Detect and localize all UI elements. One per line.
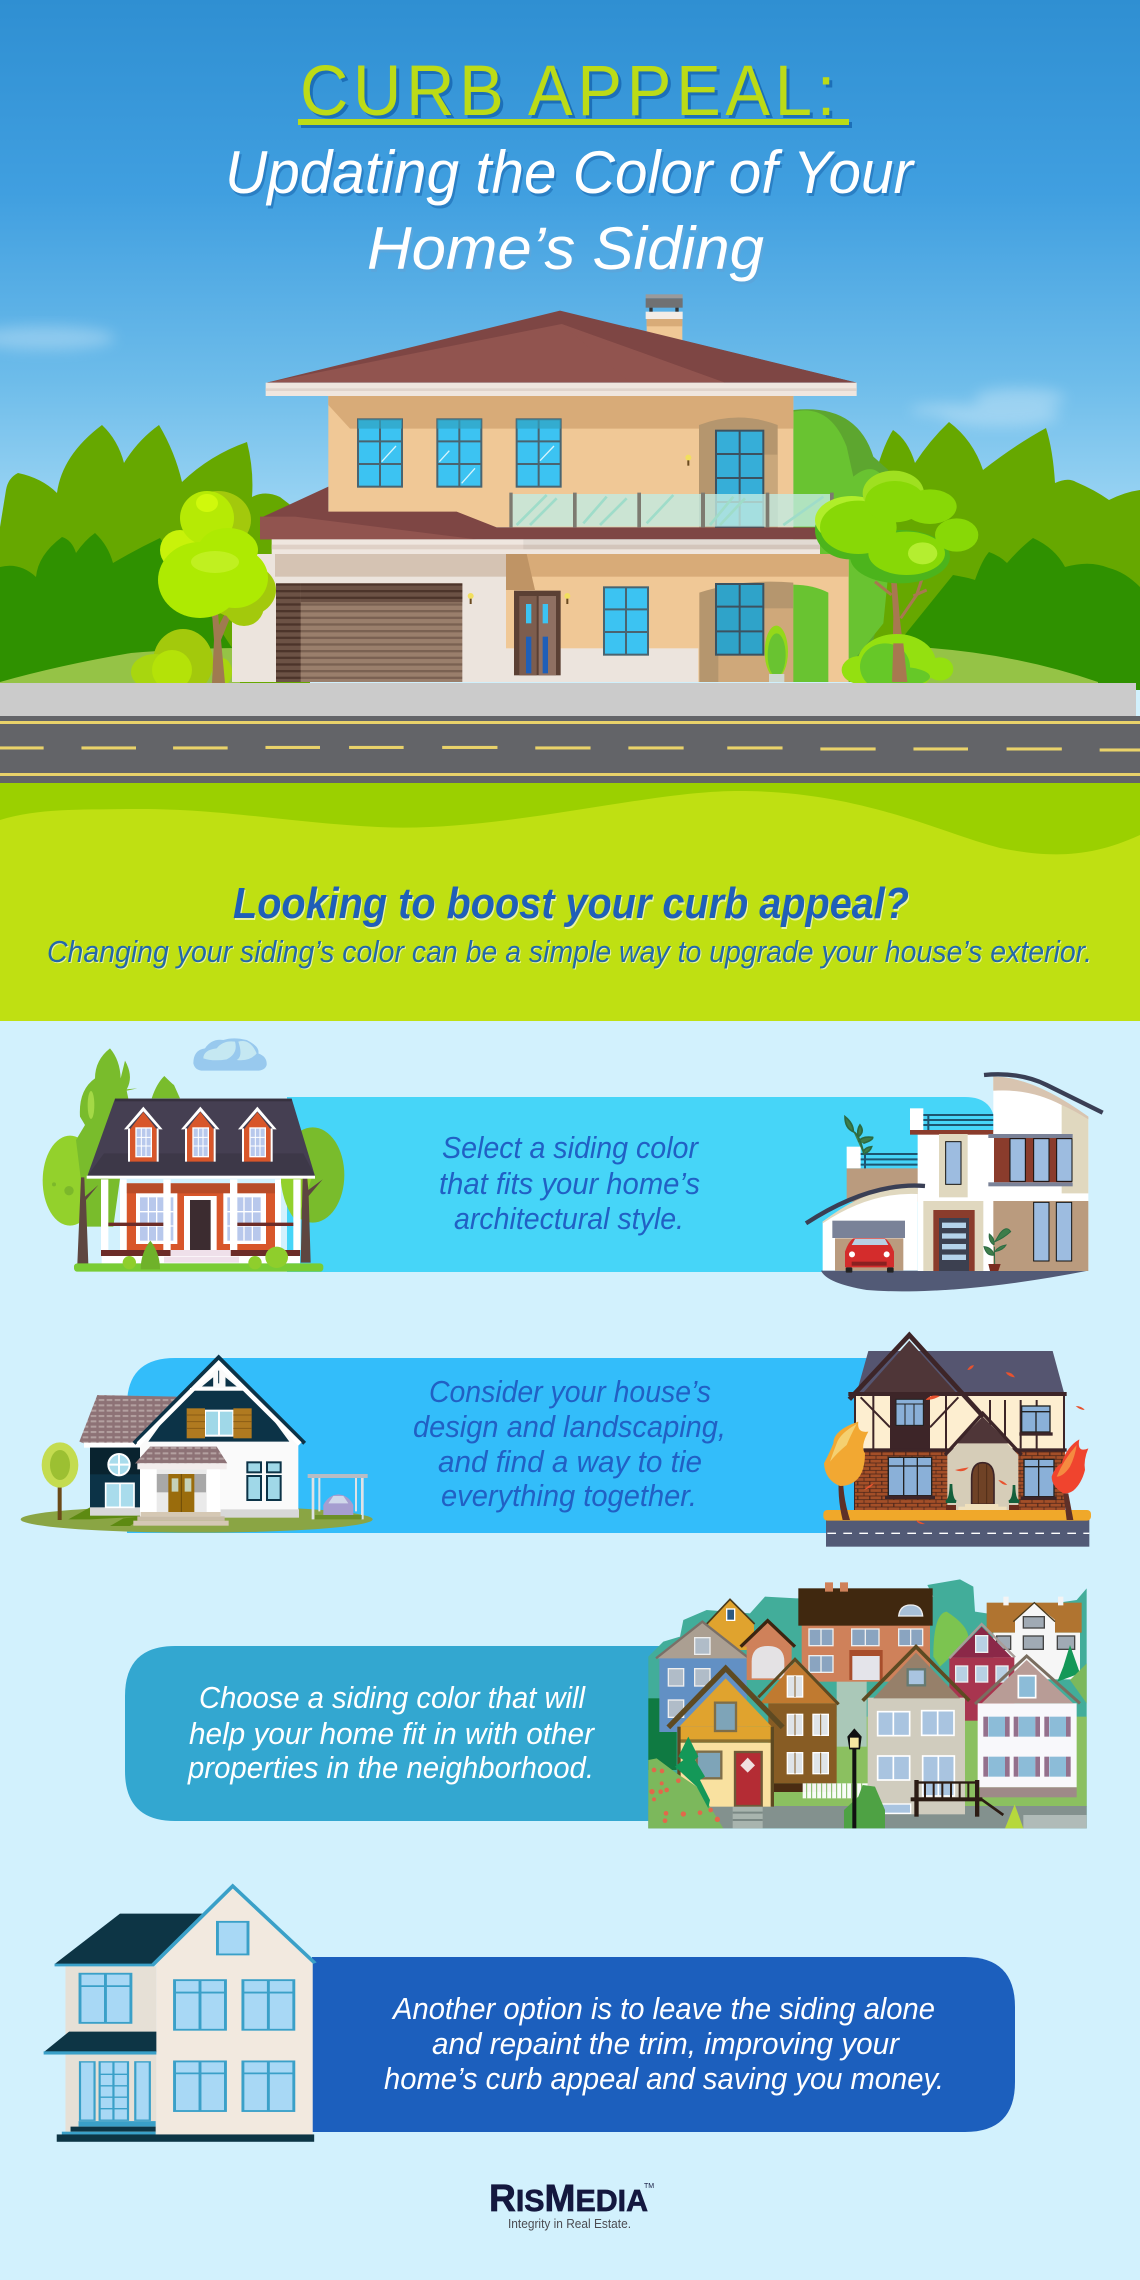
picket fence <box>803 1783 868 1798</box>
brown-roof brick house <box>798 1582 933 1682</box>
curved top roof line <box>984 1074 1103 1113</box>
road <box>0 716 1140 783</box>
ground <box>648 1612 1087 1828</box>
tip 1 bar <box>287 1097 995 1272</box>
illustration: orange porch house <box>43 1038 344 1272</box>
tip 1 text <box>439 1130 700 1236</box>
panel: tip 4 <box>44 1886 1015 2142</box>
title underline <box>298 119 849 125</box>
trademark: TM <box>644 2183 654 2190</box>
lawn and shrubs <box>74 1241 323 1272</box>
grey stone house <box>863 1647 969 1814</box>
wall lamp <box>685 455 691 466</box>
tip 4 bar <box>312 1957 1015 2132</box>
shuttered window <box>187 1408 252 1438</box>
tip 2 bar <box>127 1358 868 1533</box>
right windows <box>247 1462 281 1500</box>
steps and foundation <box>57 2121 314 2142</box>
illustration: neighborhood <box>648 1579 1087 1828</box>
tip 2 text: everything together. <box>441 1478 697 1513</box>
lower storey walls <box>232 554 849 682</box>
left tree canopy <box>158 491 276 626</box>
illustration: cream house <box>44 1886 315 2142</box>
logo wordmark: RISMEDIA <box>489 2178 648 2220</box>
autumn tree yellow <box>824 1422 868 1520</box>
potted plant <box>984 1229 1011 1271</box>
tip 3 bar <box>125 1646 660 1821</box>
small tree <box>42 1442 78 1520</box>
side roof <box>79 1395 177 1443</box>
background trees <box>43 1048 344 1264</box>
sky <box>0 0 1140 690</box>
chimney <box>646 294 683 352</box>
balcony glass railing <box>509 493 834 527</box>
logo <box>489 2178 654 2231</box>
tip 2 text <box>413 1374 726 1513</box>
heading: Looking to boost your curb appeal? <box>233 879 909 928</box>
tip 3 text: help your home fit in with other <box>189 1716 596 1751</box>
gable trim <box>55 1886 315 1965</box>
tip 2 text: and find a way to tie <box>438 1444 702 1479</box>
front porch <box>133 1447 229 1526</box>
backdrop foliage <box>648 1579 1087 1828</box>
brown house <box>758 1659 839 1792</box>
porch roof <box>44 2032 156 2055</box>
deck railing <box>911 1780 1003 1817</box>
grey roof <box>857 1351 1064 1393</box>
small yellow house <box>707 1599 755 1650</box>
red car <box>845 1238 894 1273</box>
small cone shrub <box>1005 1804 1023 1828</box>
terrace block <box>847 1108 993 1202</box>
red house <box>949 1624 1015 1721</box>
tip 2 text: design and landscaping, <box>413 1409 726 1444</box>
shrub and lamp post <box>844 1728 885 1828</box>
tip 4 text: home’s curb appeal and saving you money. <box>384 2061 944 2096</box>
panel: green intro band <box>0 783 1140 1021</box>
flowering bushes and firs <box>648 1645 1087 1828</box>
tip 1 text: Select a siding color <box>442 1130 700 1165</box>
half-timber upper floor <box>848 1392 1067 1510</box>
white shuttered house <box>975 1656 1080 1797</box>
tagline: Integrity in Real Estate. <box>508 2216 631 2231</box>
white back house <box>987 1597 1082 1679</box>
tip 2 text: Consider your house’s <box>429 1374 711 1409</box>
left wall <box>65 1966 156 2134</box>
lower porch roof <box>260 487 820 539</box>
title block <box>225 52 915 282</box>
dormers <box>124 1107 277 1162</box>
upper left roof <box>55 1914 207 1964</box>
porch archway <box>699 582 828 682</box>
right wing <box>988 1077 1088 1271</box>
upper roof <box>267 311 857 383</box>
illustration: white gabled house <box>21 1357 373 1533</box>
main wall <box>156 1887 313 2135</box>
steps <box>733 1807 763 1828</box>
large bush behind house <box>793 409 893 682</box>
panel: tip 1 <box>43 1038 1103 1291</box>
ground floor window <box>604 587 648 655</box>
balcony door window <box>716 431 763 527</box>
clouds <box>0 326 1065 427</box>
band background <box>0 783 1140 1021</box>
side wing <box>84 1443 141 1516</box>
brick ground floor <box>855 1448 1067 1511</box>
mansard roof <box>87 1099 315 1176</box>
falling leaves <box>864 1365 1085 1524</box>
subtitle line 2: Home’s Siding <box>367 215 764 282</box>
dark green wave <box>0 783 1140 854</box>
driveway <box>821 1271 1088 1291</box>
panel: tip 2 <box>21 1335 1091 1547</box>
lawn <box>21 1506 373 1533</box>
blue house <box>656 1622 749 1732</box>
upper storey wall <box>328 396 793 527</box>
tip 3 text: Choose a siding color that will <box>199 1680 586 1715</box>
upper windows <box>358 419 561 487</box>
salmon arched house <box>741 1621 795 1680</box>
road and verge <box>823 1510 1091 1547</box>
central tower <box>910 1130 994 1271</box>
tip 4 text: and repaint the trim, improving your <box>432 2026 901 2061</box>
topiary <box>765 626 788 682</box>
autumn tree red <box>1052 1439 1088 1520</box>
tip 3 text <box>187 1680 596 1785</box>
garage door <box>276 583 462 682</box>
background bushes <box>0 422 1140 690</box>
right tree <box>815 471 978 682</box>
illustration: main two-storey house <box>232 294 978 693</box>
sidewalk <box>0 683 1136 716</box>
subtitle line 1: Updating the Color of Your <box>225 139 915 206</box>
main gable <box>849 1335 983 1417</box>
panel: tip 3 <box>125 1579 1087 1828</box>
illustration: tudor house <box>823 1335 1091 1547</box>
yellow front house <box>668 1668 783 1807</box>
door with sidelights <box>80 2062 150 2120</box>
tip 1 text: architectural style. <box>454 1201 684 1236</box>
tip 4 text <box>384 1991 944 2096</box>
illustration: left tree and shrub <box>131 491 276 695</box>
left tree trunk <box>211 596 238 683</box>
carport and car <box>308 1474 368 1519</box>
stone entrance <box>945 1413 1022 1511</box>
windows <box>80 1922 294 2111</box>
plant on terrace <box>845 1117 873 1155</box>
main body <box>140 1363 299 1518</box>
panel: sky scene <box>0 0 1140 690</box>
garage wing <box>806 1186 925 1271</box>
first floor eave <box>272 539 820 554</box>
title: curb appeal: CURB APPEAL: <box>300 52 840 131</box>
gable trim <box>134 1357 305 1443</box>
tip 3 text: properties in the neighborhood. <box>187 1750 594 1785</box>
tip 4 text: Another option is to leave the siding alone <box>391 1991 935 2026</box>
left shrub <box>131 629 232 695</box>
front door <box>514 591 561 675</box>
porch and siding <box>87 1176 315 1263</box>
lamps by garage <box>468 593 570 604</box>
tip 1 text: that fits your home’s <box>439 1166 700 1201</box>
right shrub <box>842 634 953 693</box>
roof eave <box>266 383 857 396</box>
illustration: modern house <box>806 1074 1103 1291</box>
cloud <box>193 1038 267 1071</box>
